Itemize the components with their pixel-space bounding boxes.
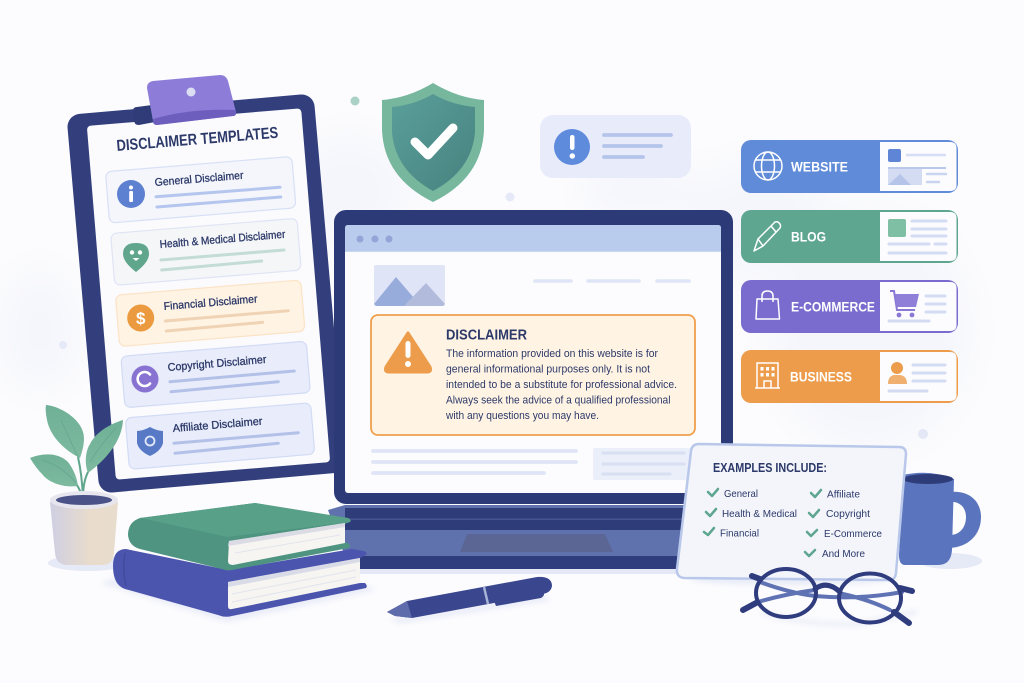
clipboard paper	[87, 108, 330, 480]
books shadow	[100, 578, 377, 622]
label: blog: BLOG	[791, 230, 826, 245]
browser dots	[356, 236, 392, 242]
laptop screen	[345, 225, 721, 493]
plant shadow	[48, 555, 128, 571]
icon: exclamation	[554, 129, 590, 165]
notification bubble	[540, 115, 691, 178]
examples list: Copyright	[826, 508, 870, 520]
text lines	[161, 250, 284, 270]
label: business: BUSINESS	[790, 370, 852, 385]
examples list: And More	[822, 548, 865, 560]
mug	[899, 473, 982, 569]
text lines	[165, 311, 288, 331]
examples title: EXAMPLES INCLUDE:	[713, 461, 827, 475]
panel: e-commerce	[741, 280, 958, 333]
examples list: General	[724, 488, 758, 500]
books	[100, 503, 377, 622]
icon: dollar: $	[136, 309, 146, 328]
icon: dollar	[127, 304, 154, 332]
background dots	[59, 96, 928, 439]
laptop screen frame	[334, 210, 733, 504]
disclaimer box	[371, 315, 695, 435]
plant leaves	[30, 405, 123, 498]
icon: person	[888, 362, 907, 384]
clipboard title: DISCLAIMER TEMPLATES	[116, 125, 279, 155]
laptop shadow	[340, 566, 690, 574]
icon: heart pin	[123, 243, 149, 272]
examples card	[677, 444, 906, 585]
card: general disclaimer	[105, 156, 296, 223]
laptop base	[328, 505, 690, 569]
icon: building	[755, 363, 780, 388]
icon: globe	[754, 152, 782, 180]
card shadow	[690, 573, 890, 585]
label: general disclaimer: General Disclaimer	[154, 170, 244, 189]
panel: website	[741, 140, 958, 193]
business thumbnail	[888, 362, 945, 391]
clipboard clip	[133, 75, 236, 125]
disclaimer body	[445, 348, 677, 422]
panel: blog	[741, 210, 958, 263]
glasses	[743, 569, 915, 624]
checkmarks	[704, 489, 821, 556]
plant pot	[50, 491, 118, 565]
trackpad	[460, 534, 613, 552]
disclaimer heading: DISCLAIMER	[446, 328, 527, 344]
notification lines	[604, 135, 671, 157]
examples list: Health & Medical	[722, 508, 797, 520]
clipboard	[66, 75, 347, 494]
e-commerce thumbnail	[889, 291, 945, 321]
label: financial disclaimer: Financial Disclaimer	[163, 293, 258, 313]
label: copyright disclaimer: Copyright Disclaimer	[167, 354, 267, 374]
icon: shield	[137, 427, 163, 456]
plant	[30, 405, 128, 571]
website thumbnail	[888, 149, 946, 185]
label: e-commerce: E-COMMERCE	[791, 300, 875, 315]
disclaimer body: intended to be a substitute for professional advice.	[446, 379, 677, 391]
card: copyright disclaimer	[121, 341, 310, 408]
nav lines	[535, 279, 689, 283]
icon: copyright	[132, 366, 158, 392]
text lines	[170, 371, 294, 392]
glasses shadow	[762, 612, 915, 624]
icon: pencil	[754, 222, 780, 251]
label: website: WEBSITE	[791, 160, 848, 175]
pen clip	[494, 590, 544, 606]
page text lines	[373, 451, 576, 473]
card: financial disclaimer	[115, 280, 305, 347]
pen shadow	[388, 595, 550, 623]
icon: info	[117, 180, 145, 208]
card: health and medical disclaimer	[111, 218, 301, 285]
text lines	[174, 433, 298, 453]
pen	[387, 577, 552, 623]
mug shadow	[918, 553, 982, 569]
examples list: Financial	[720, 528, 759, 540]
image placeholder	[374, 265, 445, 306]
card: affiliate disclaimer	[125, 403, 315, 469]
laptop	[328, 210, 733, 574]
green book	[128, 503, 351, 570]
examples list	[720, 488, 882, 560]
examples list: Affiliate	[827, 488, 860, 500]
background blobs	[0, 135, 970, 450]
blog thumbnail	[888, 219, 946, 253]
panel: business	[741, 350, 958, 403]
label: affiliate disclaimer: Affiliate Disclaimer	[172, 416, 263, 435]
label: health and medical disclaimer: Health & Medical Disclaimer	[159, 229, 286, 251]
disclaimer body: Always seek the advice of a qualified professional	[446, 394, 670, 406]
disclaimer body: The information provided on this website is for	[446, 348, 658, 360]
disclaimer body: general informational purposes only. It is not	[446, 364, 650, 376]
disclaimer body: with any questions you may have.	[445, 410, 599, 422]
glasses frame	[743, 569, 912, 623]
mug opening	[903, 474, 953, 484]
examples list: E-Commerce	[824, 528, 882, 540]
icon: cart	[890, 291, 919, 317]
icon: warning triangle	[385, 333, 431, 372]
browser title bar	[345, 225, 721, 252]
text lines	[156, 187, 281, 207]
sidebar block	[593, 448, 693, 480]
shield with check	[382, 83, 484, 202]
icon: shopping bag	[756, 291, 780, 319]
purple book	[113, 549, 367, 617]
clipboard board	[66, 93, 347, 494]
mug body	[899, 473, 954, 565]
mug handle	[950, 492, 981, 548]
glasses temples	[758, 582, 902, 610]
